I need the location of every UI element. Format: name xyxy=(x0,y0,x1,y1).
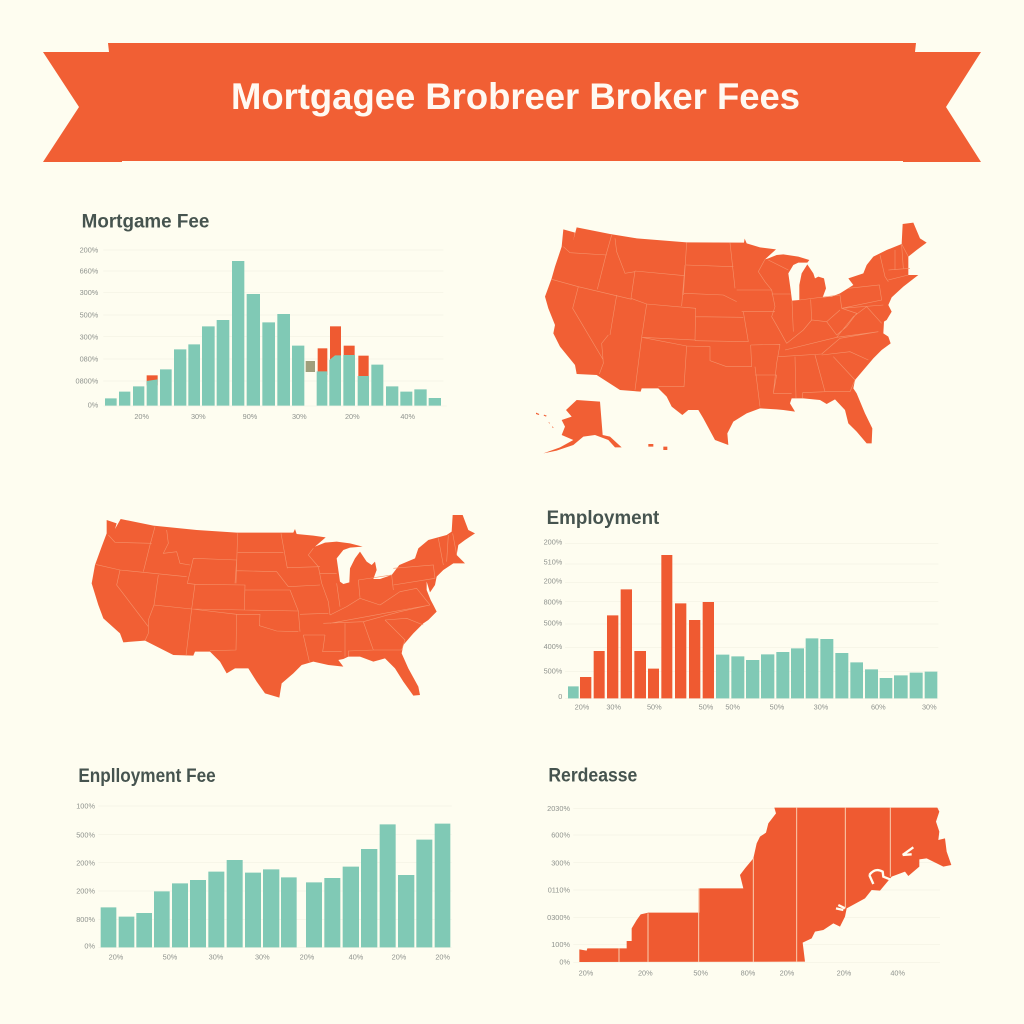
y axis labels: 200% xyxy=(80,245,99,254)
teal bars xyxy=(568,638,937,698)
state borders xyxy=(552,235,910,407)
x axis labels: 90% xyxy=(243,412,258,421)
panel: Employment chart xyxy=(544,508,938,712)
x axis labels: 30% xyxy=(814,703,829,712)
x axis labels: 20% xyxy=(575,703,590,712)
y axis labels: 300% xyxy=(80,332,99,341)
x axis labels: 20% xyxy=(392,953,407,962)
y axis labels: 500% xyxy=(544,666,563,675)
orange bars xyxy=(580,555,714,698)
x axis labels: 30% xyxy=(606,703,621,712)
x axis labels: 50% xyxy=(699,703,714,712)
x axis labels: 40% xyxy=(890,968,905,977)
y axis labels: 800% xyxy=(76,915,95,924)
y axis labels: 100% xyxy=(551,940,570,949)
heading: Mortgame Fee: Mortgame Fee xyxy=(82,211,209,232)
map: United States with Alaska and Hawaii xyxy=(536,223,927,453)
x axis labels: 20% xyxy=(780,968,795,977)
map: contiguous United States xyxy=(92,515,475,698)
x axis labels: 50% xyxy=(725,703,740,712)
y axis labels xyxy=(544,537,563,701)
y axis labels: 600% xyxy=(551,831,570,840)
y axis labels: 2030% xyxy=(547,804,570,813)
x axis labels: 20% xyxy=(300,953,315,962)
x axis labels: 30% xyxy=(292,412,307,421)
y axis labels: 800% xyxy=(544,597,563,606)
x axis labels xyxy=(575,703,937,712)
x axis labels: 50% xyxy=(647,703,662,712)
x axis labels xyxy=(134,412,415,421)
x axis labels: 50% xyxy=(770,703,785,712)
y axis labels: 300% xyxy=(551,858,570,867)
y axis labels: 200% xyxy=(544,537,563,546)
x axis labels: 20% xyxy=(435,953,450,962)
title banner xyxy=(43,43,981,162)
x axis labels: 40% xyxy=(400,412,415,421)
y axis labels: 0110% xyxy=(548,886,570,895)
y axis labels: 0% xyxy=(88,400,99,409)
x axis labels: 50% xyxy=(163,953,178,962)
y axis labels: 500% xyxy=(544,619,563,628)
x axis labels: 20% xyxy=(109,953,124,962)
Alaska and Hawaii xyxy=(536,400,667,453)
x axis labels: 60% xyxy=(871,703,886,712)
x axis labels: 40% xyxy=(349,953,364,962)
x axis labels: 20% xyxy=(134,412,149,421)
heading: Rerdeasse: Rerdeasse xyxy=(548,766,637,787)
x axis labels: 30% xyxy=(209,953,224,962)
heading: Enplloyment Fee: Enplloyment Fee xyxy=(78,766,216,787)
panel: Rerdeasse area map chart xyxy=(547,766,951,977)
banner title: Mortgagee Brobreer Broker Fees xyxy=(231,76,800,117)
panel: Mortgame Fee chart xyxy=(76,211,447,421)
y axis labels: 200% xyxy=(76,887,95,896)
y axis labels xyxy=(76,802,95,951)
panel: Enplloyment Fee chart xyxy=(76,766,452,962)
x axis labels: 20% xyxy=(345,412,360,421)
y axis labels: 0300% xyxy=(547,913,570,922)
x axis labels xyxy=(579,968,905,977)
y axis labels: 100% xyxy=(76,802,95,811)
contiguous states outline xyxy=(92,515,475,698)
y axis labels: 0% xyxy=(84,942,95,951)
x axis labels: 30% xyxy=(255,953,270,962)
x axis labels: 80% xyxy=(741,968,756,977)
teal bars xyxy=(101,824,450,947)
y axis labels: 660% xyxy=(80,266,99,275)
y axis labels: 0800% xyxy=(76,377,99,386)
x axis labels xyxy=(109,953,450,962)
x axis labels: 30% xyxy=(922,703,937,712)
x axis labels: 20% xyxy=(579,968,594,977)
y axis labels xyxy=(547,804,570,967)
y axis labels: 200% xyxy=(76,858,95,867)
x axis labels: 30% xyxy=(191,412,206,421)
y axis labels xyxy=(76,245,99,409)
contiguous states outline xyxy=(545,223,927,445)
y axis labels: 400% xyxy=(544,642,563,651)
histogram bars xyxy=(105,261,441,406)
y axis labels: 500% xyxy=(76,830,95,839)
area shape xyxy=(579,808,951,962)
x axis labels: 20% xyxy=(837,968,852,977)
heading: Employment: Employment xyxy=(547,508,660,529)
x axis labels: 50% xyxy=(693,968,708,977)
state borders xyxy=(95,527,457,662)
y axis labels: 200% xyxy=(544,577,563,586)
y axis labels: 0 xyxy=(558,692,562,701)
y axis labels: 500% xyxy=(80,310,99,319)
y axis labels: 300% xyxy=(80,288,99,297)
x axis labels: 20% xyxy=(638,968,653,977)
y axis labels: 510% xyxy=(544,558,563,567)
y axis labels: 080% xyxy=(80,355,99,364)
y axis labels: 0% xyxy=(559,958,570,967)
